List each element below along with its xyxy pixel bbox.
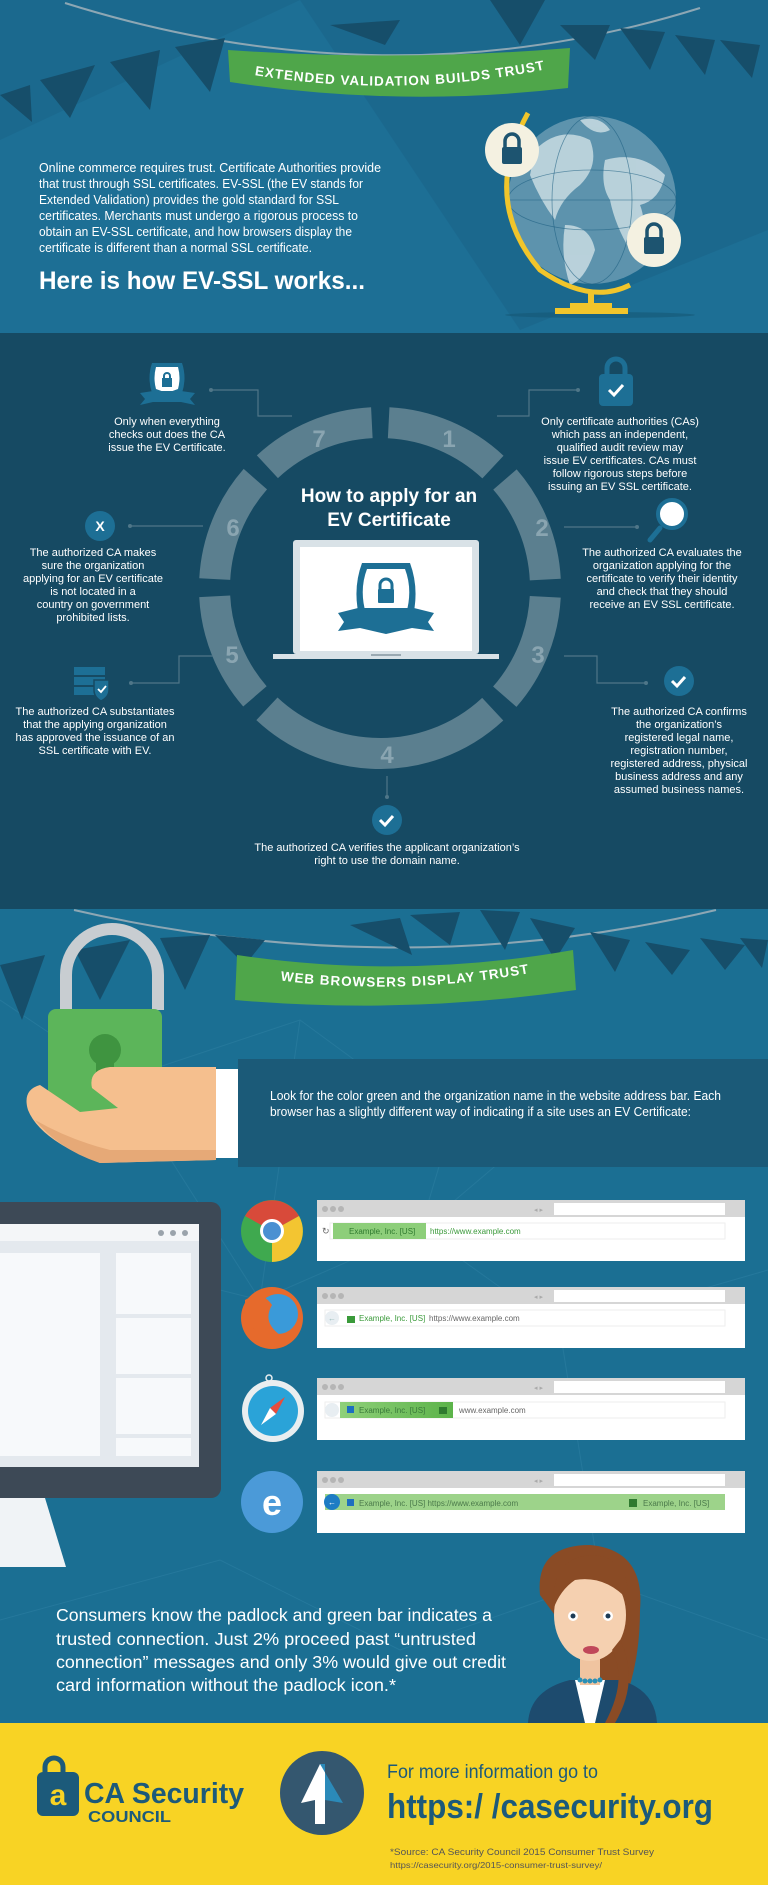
ring of seven steps: 6 (226, 515, 240, 542)
intro text: Online commerce requires trust. Certificate Authorities provide (39, 160, 381, 175)
step 3: The authorized CA confirms (611, 706, 747, 718)
step 6: country on government (37, 599, 149, 611)
section 2 background (0, 333, 768, 910)
icon: check circle (372, 805, 402, 835)
garland top (0, 0, 760, 122)
step 5 (15, 667, 175, 757)
step 5: SSL certificate with EV. (39, 745, 151, 757)
laptop with certificate badge (273, 540, 499, 659)
step 2: and check that they should (597, 586, 727, 598)
icon: globe lock right (627, 213, 681, 267)
ring of seven steps: 7 (312, 426, 326, 453)
consumer statistics text (56, 1605, 506, 1695)
step 1: Only certificate authorities (CAs) (541, 416, 699, 428)
icon: server with shield (74, 667, 109, 701)
step 6: The authorized CA makes (30, 547, 157, 559)
ring title: EV Certificate (327, 510, 451, 531)
banner: web browsers display trust: WEB BROWSERS DISPLAY TRUST (281, 964, 528, 987)
ring of seven steps: 1 (442, 426, 456, 453)
intro text: Extended Validation) provides the gold standard for SSL (39, 192, 339, 207)
intro text (39, 160, 381, 255)
icon: internet explorer (241, 1471, 303, 1533)
icon: arrow circle (280, 1751, 364, 1835)
step 4: right to use the domain name. (314, 855, 460, 867)
ring of seven steps: 3 (531, 642, 545, 669)
footer background (0, 1723, 768, 1885)
icon: chrome (241, 1200, 303, 1262)
globe illustration (505, 113, 695, 318)
logo: ca security council: COUNCIL (88, 1809, 171, 1826)
ring title: How to apply for an (301, 486, 477, 507)
step 6 (23, 511, 163, 624)
browser bar: internet explorer: ◂ ▸ (534, 1478, 543, 1485)
step 6: prohibited lists. (56, 612, 130, 624)
browser bar: internet explorer: Example, Inc. [US] https://www.example.com (359, 1499, 519, 1508)
icon: x circle (85, 511, 115, 541)
browser bar: safari: Example, Inc. [US] (359, 1406, 425, 1415)
heading: here is how ev-ssl works: Here is how EV-SSL works... (39, 267, 365, 295)
browser bar: internet explorer: Example, Inc. [US] (643, 1499, 709, 1508)
logo: ca security council: a (50, 1779, 67, 1812)
step 3: business address and any (615, 771, 743, 783)
hand holding green padlock (26, 929, 238, 1163)
step 3 (611, 666, 747, 796)
step 1: follow rigorous steps before (553, 468, 687, 480)
call to action text (387, 1762, 713, 1826)
step 7: issue the EV Certificate. (108, 442, 226, 454)
step 3: registered legal name, (625, 732, 733, 744)
browser bar: firefox: ◂ ▸ (534, 1294, 543, 1301)
browser bar: safari (317, 1378, 745, 1440)
icon: globe lock left (485, 123, 539, 177)
step 6: is not located in a (50, 586, 137, 598)
text box: look for the color green: browser has a slightly different way of indicating if a site uses an EV Certificate: (270, 1105, 691, 1119)
browser bar: chrome: ◂ ▸ (534, 1207, 543, 1214)
icon: safari (242, 1375, 304, 1442)
intro text: that trust through SSL certificates. EV-SSL (the EV stands for (39, 176, 364, 191)
step 4: The authorized CA verifies the applicant organization’s (254, 842, 520, 854)
browser bar: internet explorer: ← (328, 1498, 336, 1507)
ring title (301, 486, 477, 531)
step 2: The authorized CA evaluates the (582, 547, 742, 559)
step 1: which pass an independent, (551, 429, 688, 441)
browser bar: firefox (317, 1287, 745, 1348)
step 1: issue EV certificates. CAs must (544, 455, 696, 467)
step 3: registration number, (630, 745, 728, 757)
section 1 background (0, 0, 768, 334)
browser bar: chrome: Example, Inc. [US] (349, 1227, 415, 1236)
step 3: registered address, physical (611, 758, 747, 770)
ring of seven steps: 5 (225, 642, 239, 669)
step 7: checks out does the CA (109, 429, 226, 441)
step 6: applying for an EV certificate (23, 573, 163, 585)
icon: firefox (241, 1287, 303, 1349)
garland section 3 (0, 910, 768, 1020)
consumer statistics text: connection” messages and only 3% would give out credit (56, 1652, 506, 1672)
step 6: sure the organization (42, 560, 144, 572)
section 3 background (0, 909, 768, 1724)
logo: ca security council (37, 1758, 244, 1826)
step 5: The authorized CA substantiates (16, 706, 175, 718)
step 3: the organization’s (636, 719, 723, 731)
step 5: has approved the issuance of an (15, 732, 175, 744)
logo: ca security council: CA Security (84, 1778, 244, 1810)
banner: web browsers display trust (235, 950, 576, 1006)
ring of seven steps: 4 (380, 742, 394, 769)
browser bar: firefox: Example, Inc. [US] (359, 1314, 425, 1323)
woman illustration (528, 1545, 657, 1723)
consumer statistics text: card information without the padlock icon.* (56, 1675, 396, 1695)
ring of seven steps: 2 (535, 515, 549, 542)
source footnote (390, 1847, 654, 1870)
consumer statistics text: Consumers know the padlock and green bar indicates a (56, 1605, 492, 1625)
step 1: qualified audit review may (557, 442, 684, 454)
step 1 (541, 359, 699, 493)
step 7: Only when everything (114, 416, 220, 428)
consumer statistics text: trusted connection. Just 2% proceed past “untrusted (56, 1629, 476, 1649)
icon: magnifier (650, 500, 686, 540)
connectors (128, 388, 648, 799)
icon: check circle (664, 666, 694, 696)
step 7 (108, 363, 226, 454)
step 3: assumed business names. (614, 784, 744, 796)
step 2: organization applying for the (593, 560, 731, 572)
text box: look for the color green (238, 1059, 768, 1167)
icon: padlock check (599, 359, 633, 406)
browser bar: firefox: https://www.example.com (429, 1314, 520, 1323)
browser bar: safari: ◂ ▸ (534, 1385, 543, 1392)
browser bar: chrome (317, 1200, 745, 1261)
icon: certificate badge (140, 363, 195, 405)
step 2: receive an EV SSL certificate. (589, 599, 735, 611)
intro text: certificate is different than a normal SSL certificate. (39, 240, 312, 255)
banner: extended validation builds trust (228, 48, 570, 97)
browser bar: safari: www.example.com (458, 1406, 526, 1415)
monitor illustration (0, 1202, 221, 1567)
icon: x circle: X (95, 518, 105, 534)
call to action text: For more information go to (387, 1762, 598, 1783)
step 5: that the applying organization (23, 719, 167, 731)
call to action text: https:/ /casecurity.org (387, 1788, 713, 1826)
banner: extended validation builds trust: EXTENDED VALIDATION BUILDS TRUST (255, 60, 543, 86)
source footnote: https://casecurity.org/2015-consumer-trust-survey/ (390, 1860, 603, 1870)
source footnote: *Source: CA Security Council 2015 Consumer Trust Survey (390, 1847, 654, 1858)
ring of seven steps (206, 414, 554, 769)
icon: internet explorer: e (262, 1482, 282, 1523)
browser bar: firefox: ← (328, 1314, 336, 1323)
intro text: obtain an EV-SSL certificate, and how browsers display the (39, 224, 352, 239)
step 2 (582, 500, 742, 611)
browser bar: internet explorer (317, 1471, 745, 1533)
browser bar: chrome: https://www.example.com (430, 1227, 521, 1236)
step 2: certificate to verify their identity (586, 573, 738, 585)
browser bar: chrome: ↻ (322, 1226, 330, 1236)
text box: look for the color green: Look for the color green and the organization name in the website address bar. Each (270, 1089, 721, 1103)
intro text: certificates. Merchants must undergo a rigorous process to (39, 208, 358, 223)
step 1: issuing an EV SSL certificate. (548, 481, 692, 493)
step 4 (254, 805, 520, 867)
